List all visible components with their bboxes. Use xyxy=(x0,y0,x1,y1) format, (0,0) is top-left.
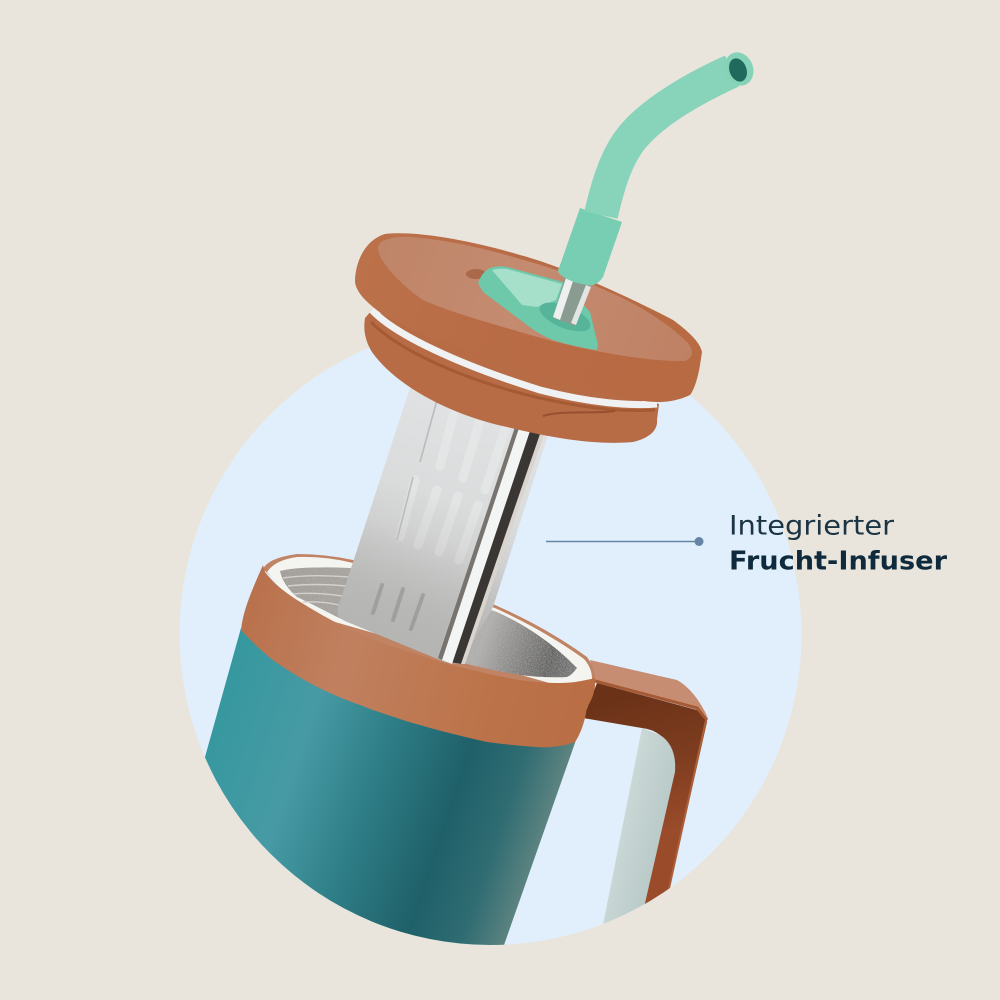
callout: leader line xyxy=(546,537,704,546)
mug handle xyxy=(583,660,708,930)
light blue circle xyxy=(180,323,802,945)
infuser basket xyxy=(338,388,548,664)
lid recess xyxy=(466,269,486,279)
metal straw xyxy=(553,276,591,326)
lid top face xyxy=(378,237,692,361)
icon: mug with infuser lid and straw xyxy=(170,48,758,965)
seat hole xyxy=(536,297,594,337)
lid side xyxy=(355,233,702,402)
gasket shadow xyxy=(371,322,655,410)
straw tube xyxy=(601,71,732,215)
mug body xyxy=(205,628,576,945)
seat top face xyxy=(492,269,562,307)
infuser centre rod xyxy=(438,427,544,664)
handle right edge highlight xyxy=(668,720,706,893)
handle underside and column xyxy=(583,683,707,912)
infuser grainy lower section xyxy=(338,480,520,664)
callout: text label xyxy=(729,510,947,576)
mug inner steel xyxy=(280,567,577,677)
infuser rib highlights xyxy=(400,412,505,560)
infographic scene xyxy=(180,52,947,945)
lid lower gasket xyxy=(364,310,659,443)
silicone straw seat xyxy=(478,266,598,350)
mug white lip xyxy=(267,557,592,686)
straw collar xyxy=(558,208,622,285)
infuser ribs xyxy=(397,400,437,540)
straw opening xyxy=(720,48,758,90)
handle inner light wall xyxy=(602,728,676,930)
callout line one: Integrierter xyxy=(729,510,894,542)
handle top edge line xyxy=(595,681,707,720)
infuser lower dark slots xyxy=(373,585,423,629)
gasket slot xyxy=(543,411,615,416)
lid xyxy=(355,233,702,402)
callout line two: Frucht-Infuser xyxy=(729,546,947,576)
white seal ring xyxy=(372,310,657,405)
handle top surface xyxy=(590,660,708,718)
mug back rim xyxy=(263,554,595,700)
mug rim band xyxy=(241,565,595,747)
inner steel bands xyxy=(283,576,348,605)
